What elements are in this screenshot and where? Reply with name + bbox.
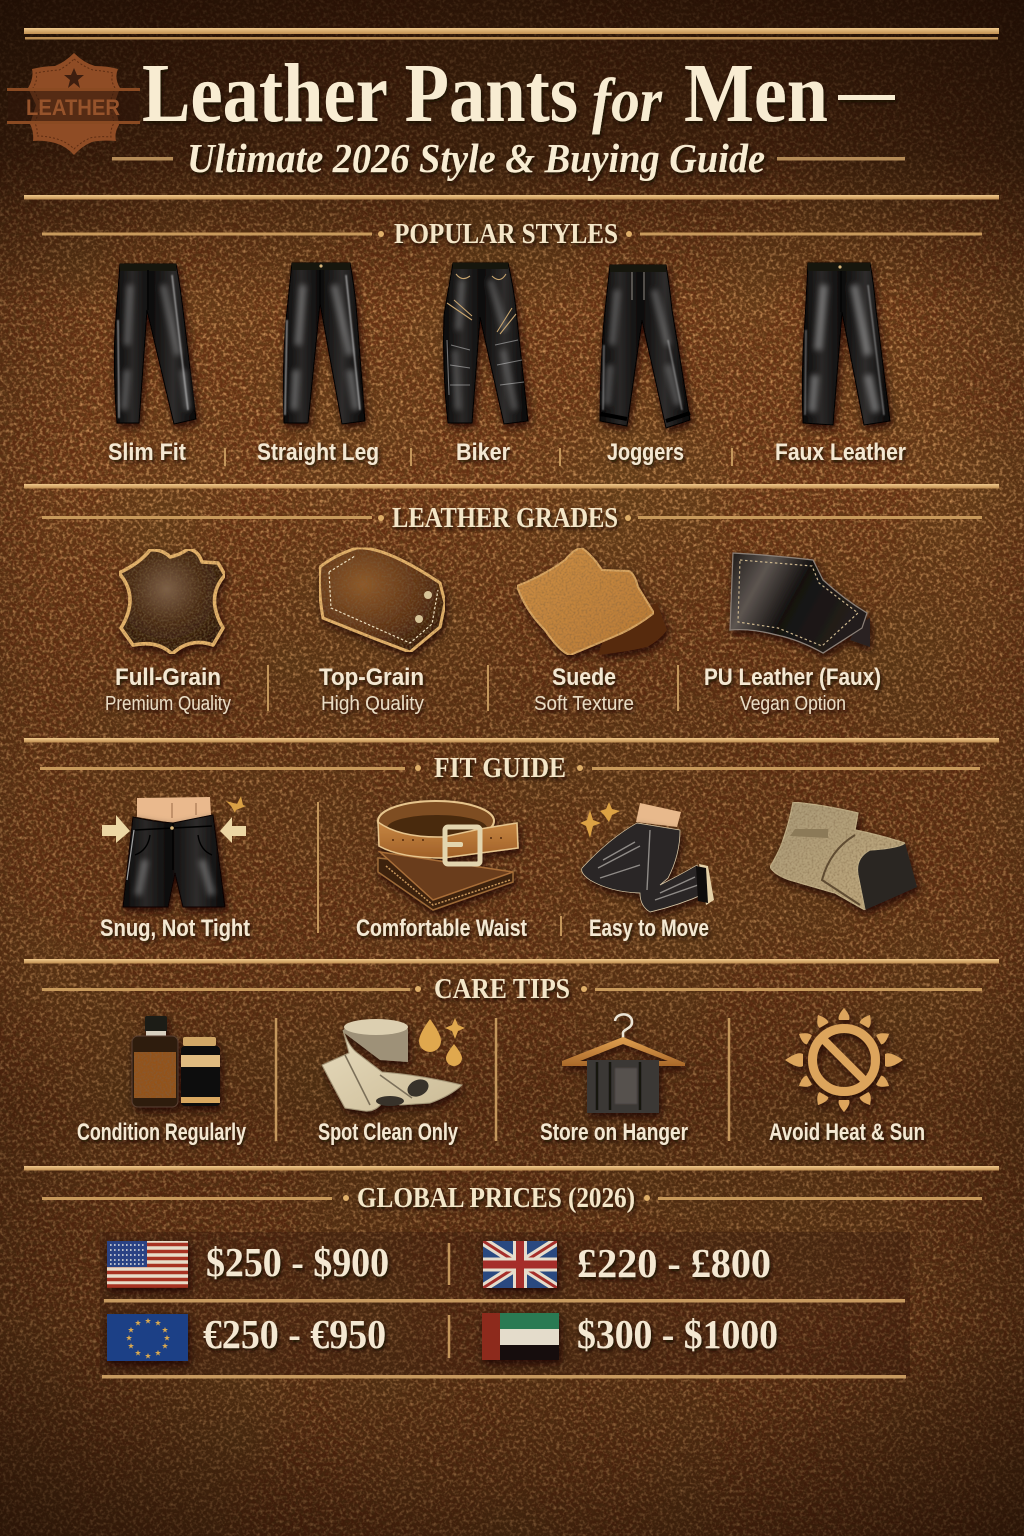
pants: biker [444, 263, 528, 424]
icon: no sun [785, 1008, 903, 1112]
price: uk: £220 - £800 [577, 1240, 771, 1286]
icon: leg movement pants [580, 802, 714, 912]
icon: hanger with pants [562, 1014, 685, 1113]
label: slim fit: Slim Fit [108, 439, 186, 466]
panel: popular styles [42, 219, 982, 466]
subtitle: Ultimate 2026 Style & Buying Guide [187, 135, 765, 181]
price: uae: $300 - $1000 [577, 1311, 778, 1357]
label: full-grain: Premium Quality [105, 693, 231, 715]
label: move: Easy to Move [589, 915, 709, 942]
heading: fit guide [40, 753, 980, 784]
label: faux leather: Faux Leather [775, 439, 906, 466]
flag: uk [483, 1241, 557, 1288]
icon: top-grain swatch [319, 548, 445, 652]
panel: leather grades [42, 503, 982, 715]
icon: suede swatch [517, 548, 667, 655]
icon: conditioner bottles [132, 1016, 220, 1107]
pants: joggers [600, 265, 690, 428]
icon: snug shorts with arrows [102, 796, 246, 907]
icon: beige leather sample [770, 802, 917, 910]
icon: pu leather swatch [730, 553, 870, 653]
title [142, 47, 895, 140]
label: pu leather [704, 664, 881, 715]
label: waist: Comfortable Waist [356, 915, 527, 942]
logo badge: leather patch: LEATHER [26, 95, 120, 120]
label: spot clean: Spot Clean Only [318, 1119, 458, 1146]
heading: care tips: CARE TIPS [434, 974, 570, 1005]
label: full-grain: Full-Grain [115, 664, 221, 691]
heading: leather grades [42, 503, 982, 534]
pants: slim fit [114, 264, 196, 424]
flag: eu [107, 1314, 188, 1361]
label: top-grain: High Quality [321, 693, 424, 715]
heading: popular styles: POPULAR STYLES [394, 219, 618, 250]
label: straight leg: Straight Leg [257, 439, 379, 466]
label: top-grain [319, 664, 424, 715]
label: suede: Suede [552, 664, 616, 691]
flag: usa [107, 1241, 188, 1287]
label: full-grain [105, 664, 231, 715]
title: Leather Pants [142, 47, 578, 140]
label: condition: Condition Regularly [77, 1119, 246, 1146]
icon: cleaning cloth and drops [322, 1018, 465, 1111]
label: snug: Snug, Not Tight [100, 915, 250, 942]
panel: care tips [42, 974, 982, 1146]
label: biker: Biker [456, 439, 510, 466]
heading: global prices: GLOBAL PRICES (2026) [357, 1183, 635, 1214]
heading: care tips [42, 974, 982, 1005]
label: top-grain: Top-Grain [319, 664, 424, 691]
label: pu leather: PU Leather (Faux) [704, 664, 881, 691]
label: suede [534, 664, 634, 715]
logo badge: leather patch [7, 53, 140, 155]
price: usa: $250 - $900 [206, 1239, 389, 1285]
heading: global prices [42, 1183, 982, 1214]
heading: leather grades: LEATHER GRADES [392, 503, 618, 534]
label: store: Store on Hanger [540, 1119, 688, 1146]
price: eu: €250 - €950 [203, 1311, 386, 1357]
label: avoid heat: Avoid Heat & Sun [769, 1119, 925, 1146]
header panel [7, 28, 999, 200]
icon: full-grain hide [119, 549, 225, 654]
heading: popular styles [42, 219, 982, 250]
panel: global prices [42, 1183, 982, 1378]
pants: faux leather [802, 263, 890, 425]
heading: fit guide: FIT GUIDE [434, 753, 566, 784]
flag: uae [482, 1313, 559, 1360]
pants: straight leg [283, 263, 365, 424]
label: joggers: Joggers [607, 439, 684, 466]
title: for [592, 67, 663, 135]
label: pu leather: Vegan Option [740, 693, 846, 715]
title: Men [684, 47, 828, 140]
panel: fit guide [40, 753, 980, 942]
icon: belt and wallet [378, 801, 518, 910]
label: suede: Soft Texture [534, 693, 634, 715]
